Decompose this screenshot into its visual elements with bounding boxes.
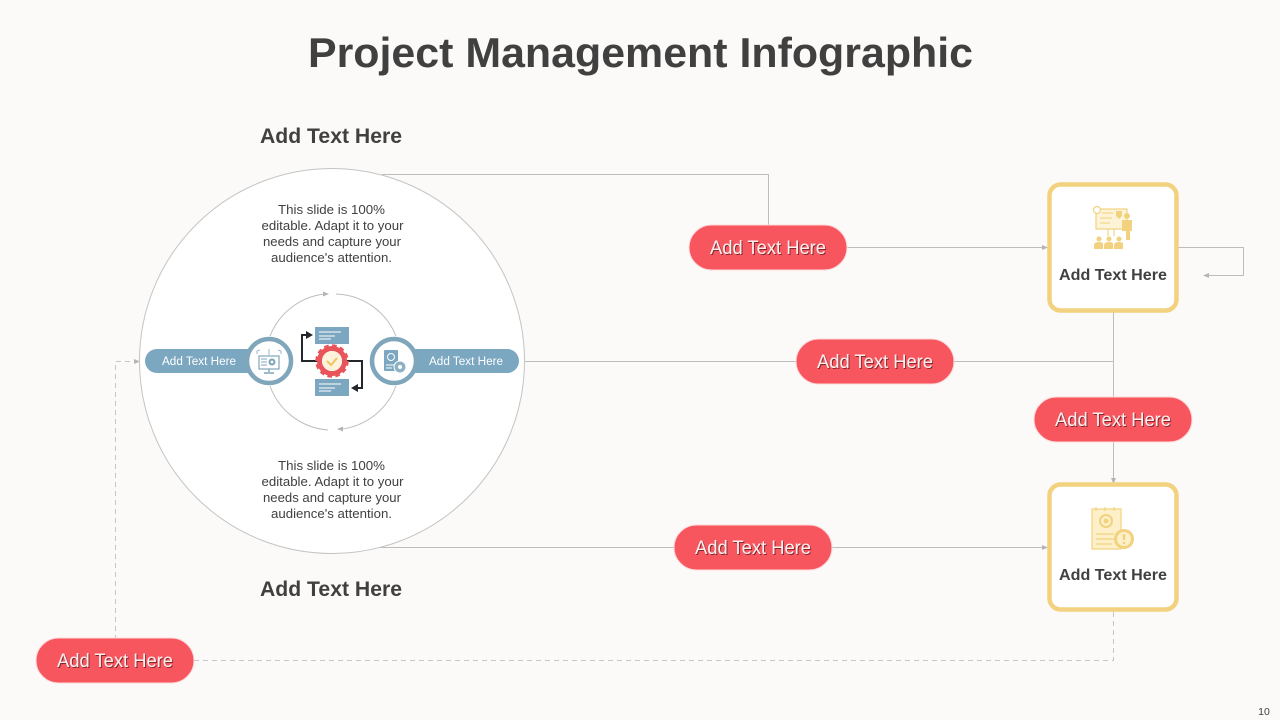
red pill: right xyxy=(1034,397,1192,442)
icon: document with gear xyxy=(372,339,416,383)
title: Project Management Infographic xyxy=(308,29,973,76)
red pill: bottom: Add Text Here xyxy=(695,538,811,559)
icon: centre gear with documents and arrows xyxy=(302,327,362,396)
heading: top: Add Text Here xyxy=(260,125,402,148)
inner cycle ring with arrows xyxy=(270,292,396,432)
label: Add Text Here xyxy=(1059,567,1167,584)
red pill: bottom xyxy=(674,525,832,570)
red pill: bottom left xyxy=(36,638,194,683)
text block: top: audience's attention. xyxy=(271,250,392,265)
connector: circle to middle pill to vertical line xyxy=(525,360,1113,362)
panel: large circle xyxy=(140,168,524,554)
right blue label pill xyxy=(404,349,519,373)
text block: bottom: needs and capture your xyxy=(263,490,402,505)
connector: dashed return path xyxy=(116,359,1114,660)
page number: 10 xyxy=(1258,706,1270,718)
text block: top xyxy=(262,202,404,265)
text block: top: This slide is 100% xyxy=(278,202,385,217)
black arrows xyxy=(302,331,362,392)
connector: circle top to top pill xyxy=(382,174,768,225)
connector: first box loop-back arrow xyxy=(1177,248,1244,278)
red gear xyxy=(317,346,347,376)
red pill: right: Add Text Here xyxy=(1055,410,1171,431)
text block: top: needs and capture your xyxy=(263,234,402,249)
red pill: bottom left: Add Text Here xyxy=(57,651,173,672)
text block: bottom: audience's attention. xyxy=(271,506,392,521)
panel: top yellow box xyxy=(1050,184,1176,310)
red pill: middle: Add Text Here xyxy=(817,352,933,373)
left blue label pill xyxy=(145,349,260,373)
text block: bottom: editable. Adapt it to your xyxy=(262,474,404,489)
label: Add Text Here xyxy=(1059,267,1167,284)
top document xyxy=(315,327,349,344)
connector: top pill to first box xyxy=(846,245,1048,250)
connector: first box down to second box xyxy=(1111,311,1116,484)
icon: checklist with gear and alert xyxy=(1092,507,1134,549)
panel: bottom yellow box xyxy=(1050,484,1176,610)
icon: monitor with gear xyxy=(247,339,291,383)
red pill: middle xyxy=(796,339,954,384)
right blue label pill: Add Text Here xyxy=(429,356,503,368)
connector: circle bottom to second box xyxy=(378,545,1048,550)
heading: bottom: Add Text Here xyxy=(260,578,402,601)
text block: top: editable. Adapt it to your xyxy=(262,218,404,233)
red pill: top: Add Text Here xyxy=(710,238,826,259)
left blue label pill: Add Text Here xyxy=(162,356,236,368)
red pill: top xyxy=(689,225,847,270)
text block: bottom: This slide is 100% xyxy=(278,458,385,473)
icon: presenter with board and audience xyxy=(1094,206,1132,249)
bottom document xyxy=(315,379,349,396)
text block: bottom xyxy=(262,458,404,521)
